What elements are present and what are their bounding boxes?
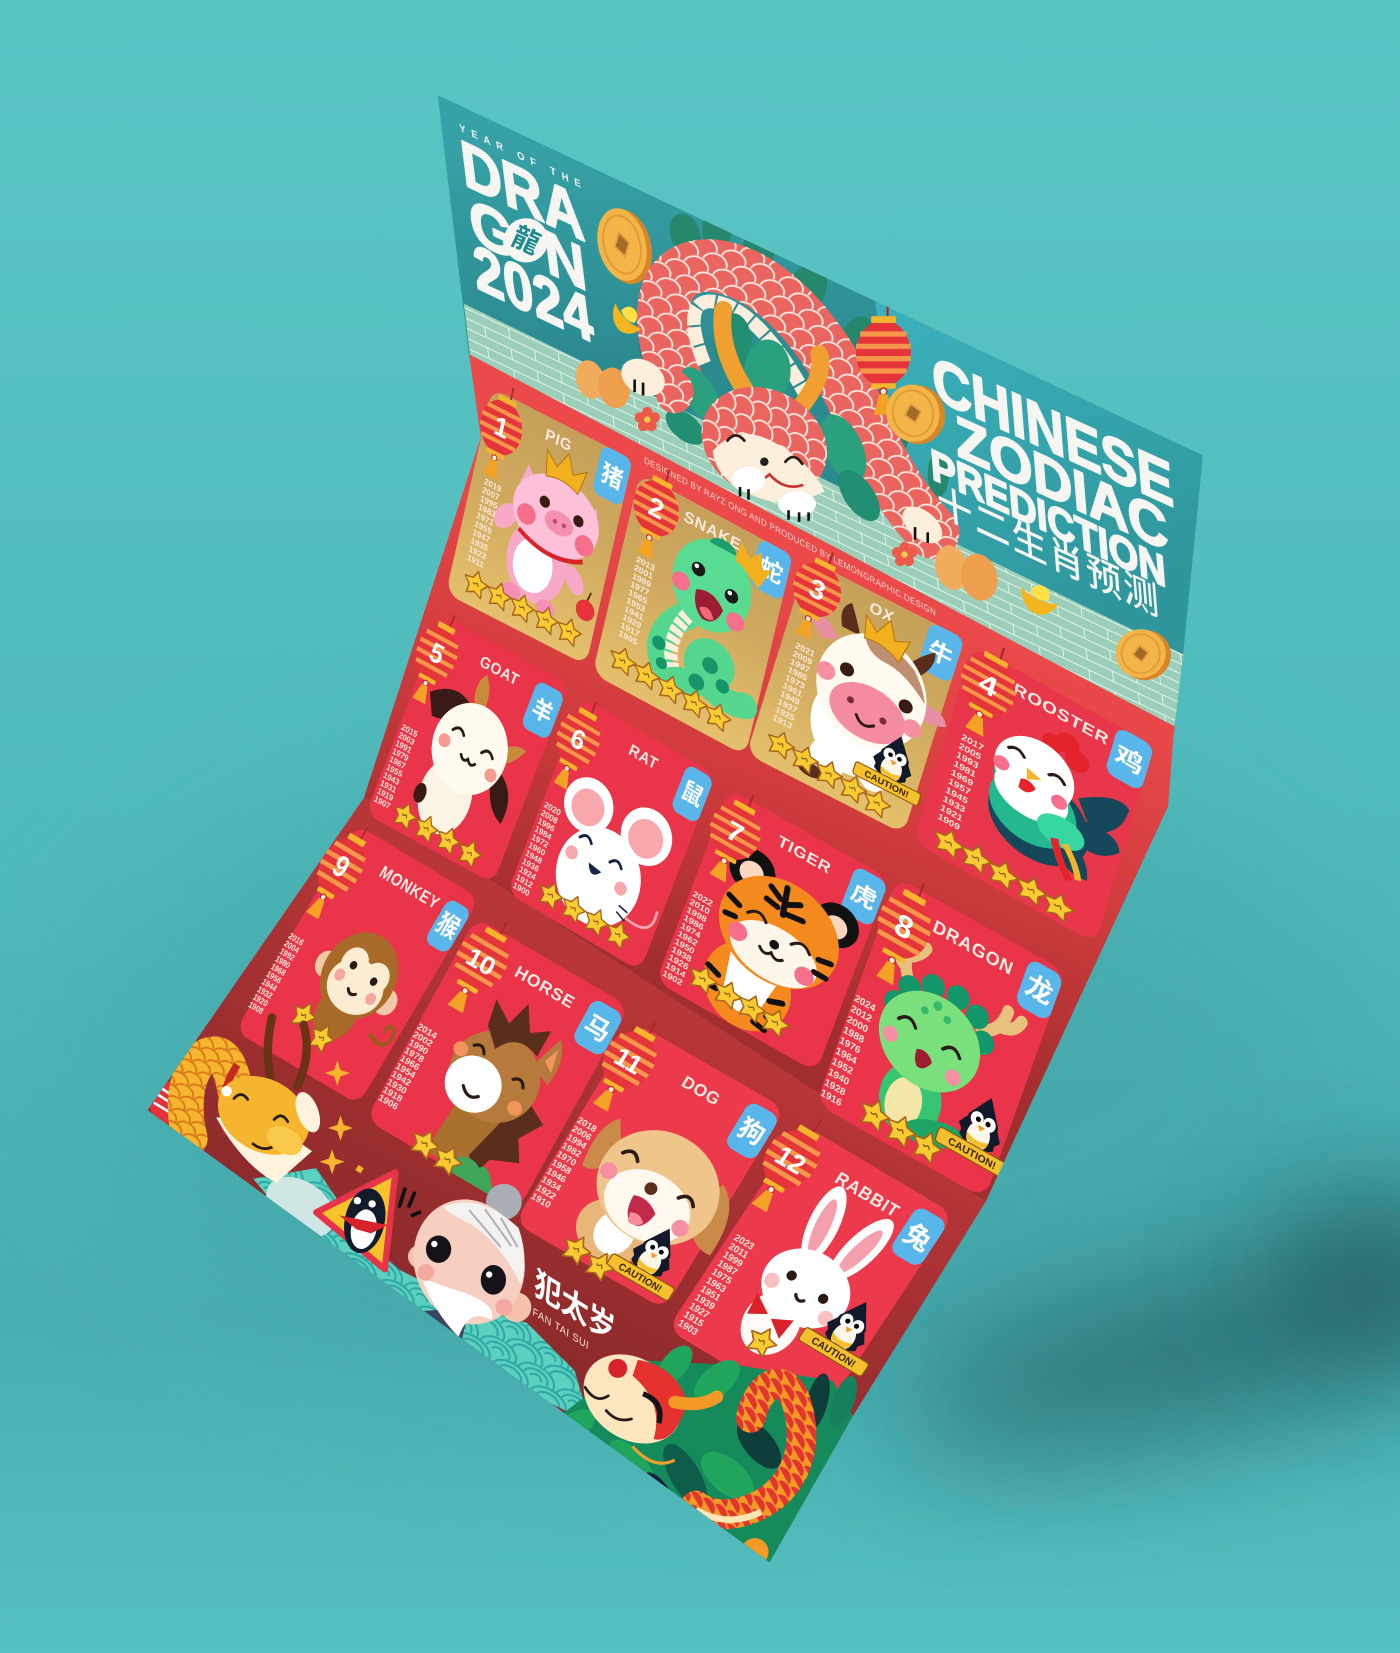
red lower background (148, 798, 986, 1562)
panel: year of the dragon title: YEAR OF THE (459, 122, 587, 193)
year list: 1966 (398, 1052, 422, 1072)
illustration: bottom dragon (548, 1336, 863, 1566)
leaves behind arch (639, 209, 949, 498)
panel: year of the dragon title: G (465, 185, 519, 275)
year list: 1936 (521, 855, 541, 874)
year list: 1945 (944, 785, 969, 807)
year list: 1973 (784, 673, 806, 691)
illustration: small dragon (838, 933, 1028, 1178)
year list: 1991 (394, 738, 413, 756)
caution penguin (935, 1078, 1027, 1180)
icon: hanging lantern (856, 301, 911, 415)
year list: 1968 (269, 962, 288, 978)
year list: 1942 (390, 1068, 413, 1088)
year list: 1949 (779, 689, 801, 707)
year list: 2011 (726, 1241, 751, 1261)
year list: 1989 (631, 571, 652, 590)
year list: 1972 (530, 831, 550, 850)
dragon character badge: 龍 (507, 221, 545, 260)
illustration: rat (528, 764, 689, 956)
lantern 7: 7 (722, 815, 748, 851)
panel: ox card: 牛 (925, 636, 956, 672)
stars (607, 642, 734, 734)
lantern 6 (541, 689, 612, 797)
year list: 1970 (555, 1149, 578, 1168)
year list: 1916 (819, 1088, 843, 1109)
year list: 1981 (952, 759, 977, 780)
chip (592, 444, 633, 507)
lantern 2 (623, 456, 688, 567)
year list: 2007 (481, 484, 501, 503)
lantern 4: 4 (975, 666, 1002, 704)
title: chinese zodiac prediction: 十二生肖预测 (936, 480, 1161, 625)
title: chinese zodiac prediction: ZODIAC (953, 404, 1170, 564)
year list: 1971 (476, 510, 495, 528)
panel: tiger card: TIGER (775, 832, 834, 878)
lantern 12: 12 (769, 1140, 811, 1181)
year list: 2004 (282, 939, 301, 956)
panel: monkey card: 猴 (431, 908, 464, 945)
caution penguin (606, 1211, 701, 1301)
lantern 10: 10 (461, 941, 501, 982)
year list: 1967 (388, 754, 407, 772)
panel: monkey card (225, 815, 482, 1105)
year list: 2003 (397, 730, 416, 748)
head (702, 387, 828, 522)
year list: 1908 (247, 1000, 266, 1017)
panel: dog card: 狗 (732, 1113, 770, 1151)
year list: 1903 (676, 1318, 700, 1338)
year list: 1974 (679, 921, 703, 941)
year list: 1925 (774, 705, 796, 723)
lantern 11: 11 (609, 1043, 647, 1080)
icon: oranges left (576, 360, 630, 408)
illustration: monkey (284, 914, 433, 1068)
year list: 1943 (382, 770, 401, 788)
panel: rabbit card: 兔 (898, 1218, 937, 1257)
icon: gold ingot right (1014, 579, 1062, 620)
year list: 2024 (853, 993, 877, 1015)
year list: 1994 (565, 1132, 589, 1151)
year list: 2001 (633, 562, 654, 581)
panel: year of the dragon title: 2024 (469, 229, 597, 357)
year list: 1957 (947, 777, 972, 798)
panel: rat card: RAT (626, 741, 660, 774)
year list: 2017 (960, 733, 985, 754)
year list: 1962 (676, 929, 699, 948)
panel: snake card (592, 456, 797, 756)
icon: coin top (597, 208, 652, 284)
chip (749, 538, 793, 602)
year list: 1980 (273, 954, 292, 971)
illustration: snake (647, 511, 779, 715)
year list: 1928 (823, 1077, 847, 1099)
chip (917, 622, 965, 684)
lantern 4 (948, 631, 1026, 746)
year list: 2020 (543, 799, 563, 818)
year list: 1931 (379, 778, 398, 795)
year list: 1927 (687, 1301, 711, 1321)
text: fan tai sui: FAN TAI SUI (532, 1306, 590, 1353)
illustration: old man (397, 1184, 541, 1355)
chip (520, 680, 565, 741)
year list: 1993 (955, 750, 980, 771)
year list: 1954 (394, 1060, 418, 1081)
illustration: rabbit (722, 1175, 908, 1382)
year list: 1921 (939, 803, 964, 824)
year list: 1958 (550, 1157, 573, 1176)
icon: gold ingot left (612, 303, 641, 334)
illustration: dog (542, 1100, 756, 1307)
stars (390, 798, 485, 870)
year list: 1933 (942, 794, 967, 816)
panel: horse card: 马 (579, 1009, 616, 1048)
icon: oranges right (930, 542, 1003, 605)
year list: 1990 (407, 1036, 431, 1057)
year list: 1995 (479, 493, 499, 511)
tail tip (741, 1538, 769, 1566)
panel: snake card: SNAKE (682, 508, 743, 554)
panel: teal header (438, 95, 1203, 675)
panel: monkey card: MONKEY (376, 862, 443, 914)
panel: rat card: 鼠 (678, 776, 707, 812)
year list: 1983 (477, 501, 497, 520)
head (566, 1336, 717, 1463)
year list: 1955 (385, 762, 404, 780)
panel: rat card (498, 689, 717, 971)
year list: 2005 (958, 741, 983, 763)
green foliage (548, 1339, 863, 1562)
lantern 6: 6 (566, 722, 590, 757)
year list: 1992 (278, 946, 297, 963)
chip (1104, 726, 1154, 792)
year list: 1937 (777, 697, 798, 715)
chip (571, 997, 625, 1058)
year list: 1997 (789, 656, 811, 675)
year list: 1946 (545, 1166, 568, 1185)
panel: horse card (363, 908, 635, 1214)
drum (150, 1082, 183, 1124)
stars (536, 877, 633, 952)
red upper background (364, 354, 1177, 1202)
year list: 1960 (527, 839, 547, 858)
chip (670, 763, 714, 824)
panel: ox card (741, 539, 978, 838)
year list: 1941 (624, 604, 644, 623)
year list: 1979 (391, 746, 410, 764)
year list: 1999 (720, 1250, 745, 1270)
caution penguin (798, 1283, 898, 1377)
icon: warning triangle with penguin (316, 1172, 395, 1269)
lantern 5 (401, 604, 470, 711)
year list: 1987 (715, 1258, 739, 1278)
year list: 1959 (474, 518, 493, 537)
year list: 1914 (664, 960, 688, 980)
illustration: rooster (973, 701, 1143, 901)
year list: 1950 (673, 937, 696, 956)
year list: 1961 (782, 681, 803, 699)
year list: 2013 (635, 554, 656, 573)
illustration: gold dragon lower-left (150, 1017, 325, 1183)
year list: 1985 (787, 665, 808, 683)
year list: 1924 (518, 864, 538, 882)
title: chinese zodiac prediction: PREDICTION (929, 440, 1168, 597)
illustration: horse (401, 981, 590, 1202)
year list: 1944 (260, 977, 279, 994)
year list: 2014 (416, 1021, 440, 1041)
year list: 2019 (483, 476, 503, 494)
panel: rooster card: 鸡 (1112, 740, 1147, 780)
panel: year of the dragon title (457, 122, 597, 357)
year list: 1917 (620, 620, 640, 639)
panel: dog card: DOG (678, 1072, 724, 1110)
year list: 2006 (570, 1124, 593, 1143)
stars (462, 566, 583, 649)
year list: 1902 (661, 968, 684, 988)
year list: 1956 (264, 969, 283, 986)
panel: rooster card: ROOSTER (1011, 680, 1111, 749)
year list: 1909 (936, 812, 961, 833)
year list: 1923 (468, 543, 487, 562)
chip (724, 1100, 780, 1162)
lantern 8: 8 (890, 906, 918, 947)
caution penguin: CAUTION! (863, 769, 910, 800)
body arch (663, 266, 933, 532)
year list: 1988 (842, 1025, 866, 1046)
year list: 1919 (376, 786, 395, 803)
year list: 1978 (403, 1044, 426, 1065)
stars (556, 1230, 620, 1284)
year list: 2009 (792, 648, 813, 667)
lantern 1 (470, 376, 531, 486)
year list: 1938 (670, 944, 693, 964)
chip (839, 865, 888, 928)
panel: tiger card (651, 781, 892, 1072)
panel: dragon card: 龙 (1022, 969, 1057, 1011)
lantern 3: 3 (806, 572, 829, 607)
year list: 2016 (287, 931, 306, 948)
credit line: DESIGNED BY RAYZ ONG AND PRODUCED BY LEMONGRAPHIC.DESIGN (644, 455, 936, 618)
text: fan tai sui: 犯太岁 (533, 1264, 617, 1350)
caution penguin: CAUTION! (809, 1336, 857, 1370)
brick wall band (464, 304, 1186, 738)
lantern 9 (295, 815, 383, 926)
year list: 2002 (411, 1029, 435, 1049)
year list: 2012 (849, 1004, 873, 1025)
year list: 1918 (381, 1084, 405, 1104)
caution penguin (852, 720, 934, 806)
lantern 3 (780, 539, 852, 648)
year list: 1907 (373, 794, 392, 811)
icon: flower left (635, 407, 660, 431)
year list: 1926 (667, 952, 690, 972)
panel: goat card: 羊 (528, 693, 557, 729)
year list: 1920 (251, 992, 270, 1009)
panel: snake card: 蛇 (756, 551, 785, 590)
panel: ox card: OX (867, 599, 896, 627)
chip (424, 898, 472, 955)
year list: 2015 (400, 722, 419, 740)
year list: 1953 (626, 595, 646, 614)
panel: pig card: 猪 (599, 459, 625, 495)
year list: 1922 (534, 1183, 558, 1202)
panel: year of the dragon title: N (540, 216, 590, 305)
stars (930, 823, 1077, 925)
year list: 1940 (827, 1067, 851, 1088)
caution penguin: CAUTION! (616, 1261, 664, 1295)
sparkles (319, 1061, 364, 1174)
year list: 1965 (628, 587, 648, 606)
year list: 1911 (466, 552, 485, 570)
stars (856, 1093, 946, 1167)
year list: 1964 (834, 1046, 858, 1067)
panel: rabbit card: RABBIT (831, 1168, 904, 1221)
stars (762, 726, 896, 820)
year list: 1905 (618, 628, 638, 647)
illustration: top dragon (615, 209, 949, 550)
year list: 2008 (540, 807, 560, 826)
year list: 2000 (845, 1014, 870, 1036)
year list: 1948 (524, 847, 544, 866)
year list: 1982 (560, 1140, 583, 1159)
panel: dog card (501, 1008, 801, 1321)
year list: 1930 (385, 1076, 409, 1096)
horns (722, 310, 820, 416)
year list: 1951 (698, 1284, 723, 1304)
year list: 1906 (377, 1092, 400, 1112)
poster (148, 95, 1203, 1566)
icon: exclamation marks (400, 1189, 420, 1216)
year list: 1976 (838, 1035, 862, 1057)
arch inner leaves (659, 313, 888, 528)
stars (405, 1124, 468, 1178)
illustration: goat (386, 652, 546, 862)
poster shadow (105, 748, 1400, 1493)
stars (742, 1322, 783, 1360)
lantern 10 (433, 908, 525, 1022)
stars (282, 997, 344, 1055)
year list: 2010 (688, 897, 711, 916)
lantern 8 (861, 868, 944, 994)
icon: flower right (892, 542, 917, 566)
front paw right (902, 506, 942, 544)
illustration: pig (474, 423, 624, 639)
panel: year of the dragon title: DRA (457, 126, 588, 257)
year list: 1912 (515, 872, 535, 891)
chip (1014, 958, 1064, 1022)
lantern 2: 2 (646, 490, 667, 526)
panel: goat card: GOAT (477, 653, 522, 690)
year list: 2023 (732, 1232, 757, 1253)
year list: 1986 (682, 913, 705, 932)
panel: tiger card: 虎 (847, 878, 880, 915)
chip (888, 1205, 948, 1268)
year list: 1935 (470, 535, 489, 553)
panel: goat card (356, 604, 571, 883)
year list: 1969 (950, 768, 975, 789)
front paw left (621, 358, 694, 414)
year list: 1977 (629, 579, 650, 598)
panel: rooster card (911, 631, 1158, 944)
panel: rabbit card (654, 1105, 971, 1426)
year list: 2018 (575, 1115, 599, 1134)
year list: 1929 (622, 612, 642, 631)
year list: 1913 (772, 713, 793, 731)
illustration: teal waves along lower edge (253, 1165, 590, 1423)
year list: 1934 (540, 1174, 563, 1194)
caution penguin: CAUTION! (946, 1135, 997, 1172)
lantern 1: 1 (491, 410, 511, 445)
year list: 1963 (704, 1275, 729, 1296)
icon: coin right (1112, 625, 1174, 684)
panel: pig card: PIG (544, 426, 573, 456)
lantern 5: 5 (425, 637, 448, 671)
panel: dragon card (812, 868, 1079, 1205)
year list: 1900 (512, 880, 531, 899)
illustration: ox (764, 583, 967, 830)
year list: 2022 (691, 889, 714, 908)
year list: 1996 (536, 815, 556, 834)
icon: coin middle (886, 384, 946, 444)
year list: 1947 (472, 527, 491, 545)
title: chinese zodiac prediction (929, 343, 1176, 625)
year list: 1998 (685, 905, 708, 924)
body (696, 1384, 802, 1514)
stars (685, 960, 793, 1040)
year list: 1952 (830, 1056, 855, 1078)
title: chinese zodiac prediction: CHINESE (930, 343, 1176, 521)
panel: pig card (442, 376, 635, 665)
year list: 1932 (255, 984, 275, 1001)
illustration: tiger (679, 839, 867, 1068)
year list: 1915 (681, 1309, 706, 1330)
year list: 2021 (794, 640, 816, 659)
lantern 12 (737, 1105, 840, 1221)
year list: 1975 (709, 1267, 734, 1287)
lantern 9: 9 (327, 848, 356, 885)
panel: dragon card: DRAGON (930, 916, 1016, 979)
year list: 1910 (529, 1191, 553, 1210)
year list: 1984 (533, 823, 553, 842)
year list: 1939 (692, 1292, 717, 1313)
lantern 7 (695, 781, 773, 891)
panel: horse card: HORSE (511, 962, 579, 1013)
lantern 11 (579, 1008, 675, 1120)
